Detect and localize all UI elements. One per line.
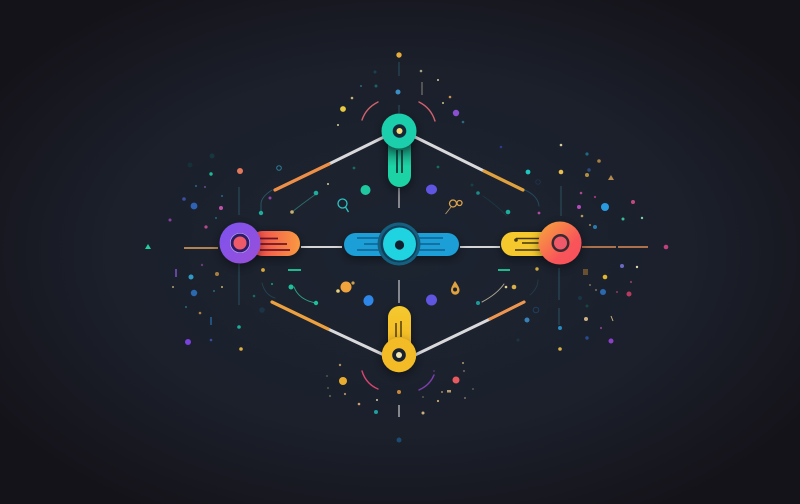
connector lines xyxy=(184,62,648,417)
icon: drop xyxy=(451,281,460,295)
icon: key links xyxy=(446,200,462,214)
yellow disc xyxy=(382,338,416,372)
yellow pill xyxy=(388,306,411,356)
particle dots: bottom xyxy=(326,362,474,442)
bottom left branch xyxy=(272,302,384,355)
pill marks xyxy=(397,150,402,173)
ring xyxy=(552,234,570,252)
particle dots: right xyxy=(476,144,668,351)
decorative arcs xyxy=(261,102,539,390)
horizontal links xyxy=(184,247,648,248)
orange disc xyxy=(538,222,582,264)
top left branch xyxy=(275,137,384,190)
node: center blue xyxy=(344,222,459,266)
node: right orange xyxy=(501,222,582,264)
node: bottom yellow xyxy=(382,306,416,372)
outer ring xyxy=(378,222,420,266)
icon: magnifier xyxy=(338,199,348,212)
accent dashes xyxy=(176,269,613,325)
node: left purple xyxy=(220,222,300,264)
node: top green xyxy=(382,114,416,187)
core xyxy=(554,236,567,250)
red pill xyxy=(250,231,300,256)
cyan disc xyxy=(383,228,416,260)
icon: planet xyxy=(336,281,355,293)
core xyxy=(396,352,402,358)
blue pill xyxy=(344,233,459,256)
particle dots: top xyxy=(327,52,480,195)
mid ring xyxy=(380,226,418,262)
bottom right branch xyxy=(415,302,524,355)
ring xyxy=(230,233,250,253)
core xyxy=(234,236,246,250)
hole xyxy=(395,240,404,250)
core xyxy=(396,128,402,134)
marker dot xyxy=(514,238,518,242)
yellow pill xyxy=(501,232,553,256)
pill marks xyxy=(357,238,445,250)
ring xyxy=(392,348,406,362)
particle dots: left xyxy=(168,154,318,351)
large coloured blobs xyxy=(360,184,437,308)
pill marks xyxy=(515,238,541,250)
pill marks xyxy=(260,238,290,250)
top right branch xyxy=(415,137,523,190)
purple disc xyxy=(220,222,260,264)
vertical links xyxy=(239,62,561,417)
pill marks xyxy=(396,321,401,337)
green pill xyxy=(388,135,411,187)
marker triangles xyxy=(145,175,614,249)
green disc xyxy=(382,114,416,148)
ring xyxy=(393,124,406,138)
